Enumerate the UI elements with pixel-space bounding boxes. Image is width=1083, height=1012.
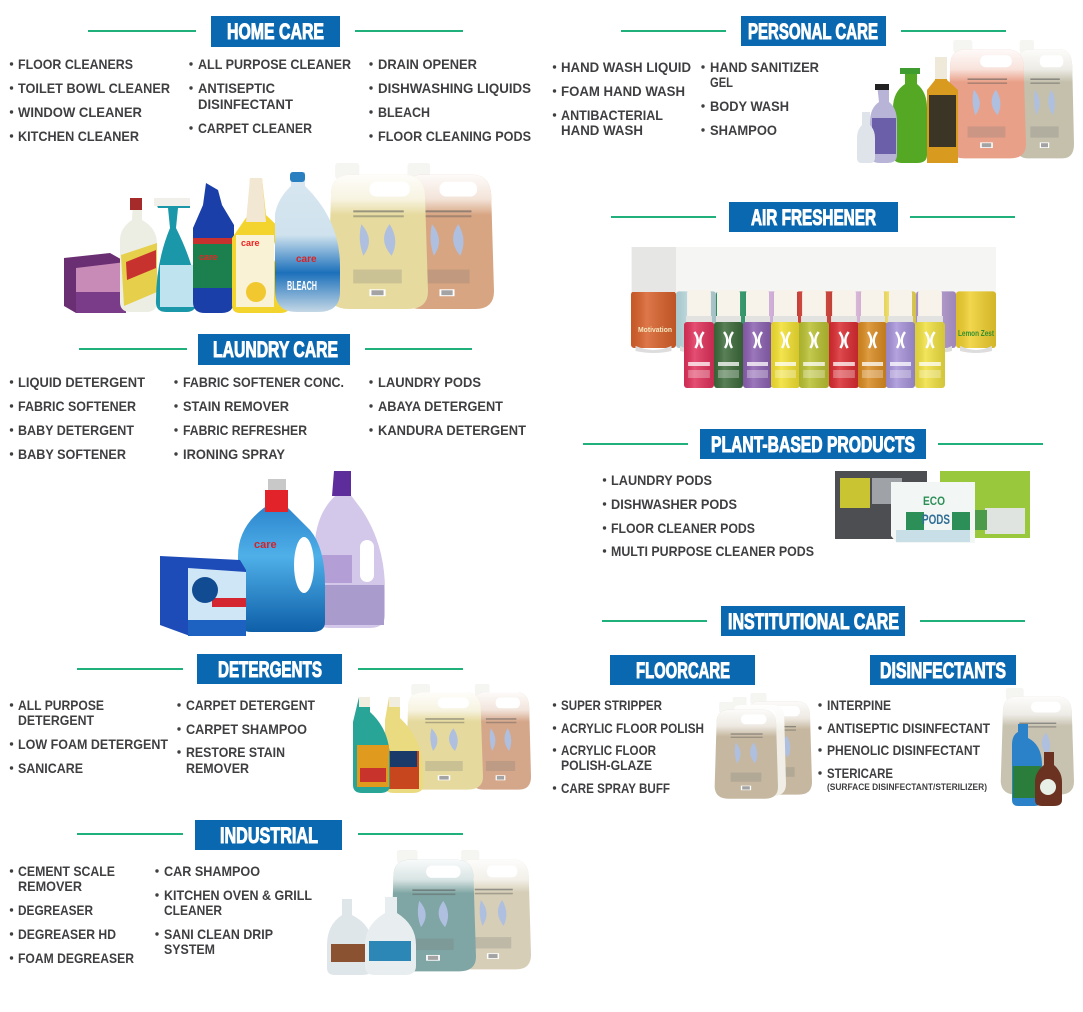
sub-heading: floorcare: FLOORCARE xyxy=(636,658,730,683)
list: industrial column 2: SANI CLEAN DRIP xyxy=(164,927,273,942)
list: laundry column 1 xyxy=(10,375,146,462)
list: plant-based products: FLOOR CLEANER PODS xyxy=(611,521,755,536)
panel: detergents xyxy=(10,654,531,793)
list: disinfectants: (SURFACE DISINFECTANT/STERILIZER) xyxy=(827,781,987,792)
panel: personal care xyxy=(553,16,1074,163)
list: detergents column 2 xyxy=(177,698,316,776)
heading: industrial: INDUSTRIAL xyxy=(220,823,318,848)
list: home care column 1: WINDOW CLEANER xyxy=(18,105,142,120)
list: disinfectants: ANTISEPTIC DISINFECTANT xyxy=(827,721,991,736)
product group: disinfectants xyxy=(1001,688,1074,806)
list: detergents column 2: CARPET DETERGENT xyxy=(186,698,316,713)
product group: pods boxes: ECO xyxy=(923,494,945,508)
heading: home care xyxy=(211,16,340,47)
list: detergents column 1 xyxy=(10,698,169,776)
list: industrial column 1: DEGREASER xyxy=(18,903,93,918)
list: laundry column 1: BABY SOFTENER xyxy=(18,447,126,462)
panel: plant-based products xyxy=(583,429,1043,559)
heading: industrial xyxy=(195,820,342,850)
heading: air freshener: AIR FRESHENER xyxy=(751,205,876,230)
product group: home care xyxy=(64,163,494,313)
heading: detergents: DETERGENTS xyxy=(218,657,322,682)
list: industrial column 2: KITCHEN OVEN & GRILL xyxy=(164,888,312,903)
list: floorcare: CARE SPRAY BUFF xyxy=(561,781,670,796)
product group: laundry care: care xyxy=(254,539,277,551)
list: laundry column 2: FABRIC SOFTENER CONC. xyxy=(183,375,344,390)
list: personal care column 1: HAND WASH LIQUID xyxy=(561,60,691,75)
panel: laundry care xyxy=(10,334,527,636)
list: floorcare: POLISH-GLAZE xyxy=(561,758,652,773)
panel: institutional care xyxy=(553,606,1074,806)
list: industrial column 1: CEMENT SCALE xyxy=(18,864,115,879)
list: detergents column 1: ALL PURPOSE xyxy=(18,698,104,713)
list: personal care column 1: FOAM HAND WASH xyxy=(561,84,685,99)
heading: plant-based products xyxy=(700,429,926,459)
heading: plant-based products: PLANT-BASED PRODUCTS xyxy=(711,432,915,457)
list: industrial column 1: DEGREASER HD xyxy=(18,927,116,942)
panel: industrial xyxy=(10,820,531,975)
sub-heading: disinfectants: DISINFECTANTS xyxy=(880,658,1006,683)
list: detergents column 2: REMOVER xyxy=(186,761,249,776)
product group: home care: care xyxy=(296,254,317,265)
list: industrial column 2: CAR SHAMPOO xyxy=(164,864,260,879)
panel: home care xyxy=(10,16,531,313)
list: plant-based products: MULTI PURPOSE CLEANER PODS xyxy=(611,544,814,559)
heading: air freshener xyxy=(729,202,898,232)
list: home care column 3: FLOOR CLEANING PODS xyxy=(378,129,531,144)
heading: personal care: PERSONAL CARE xyxy=(748,19,878,44)
product group: laundry care xyxy=(160,471,385,636)
list: industrial column 1: REMOVER xyxy=(18,879,82,894)
heading: detergents xyxy=(197,654,342,684)
list: plant-based products: DISHWASHER PODS xyxy=(611,497,737,512)
list: home care column 2: CARPET CLEANER xyxy=(198,121,312,136)
product group: pods boxes: PODS xyxy=(922,511,950,527)
list: home care column 1: TOILET BOWL CLEANER xyxy=(18,81,170,96)
list: plant-based products: LAUNDRY PODS xyxy=(611,473,712,488)
list: floorcare xyxy=(553,698,704,796)
product group: air freshener cans: Motivation xyxy=(638,327,672,334)
heading: institutional care: INSTITUTIONAL CARE xyxy=(728,609,899,634)
list: disinfectants xyxy=(818,698,991,792)
list: personal care column 2: BODY WASH xyxy=(710,99,789,114)
list: personal care column 1: HAND WASH xyxy=(561,123,643,138)
product group: home care: care xyxy=(241,238,260,248)
product group: detergents xyxy=(353,684,531,793)
heading: home care: HOME CARE xyxy=(227,19,324,44)
list: personal care column 2 xyxy=(701,60,819,138)
list: home care column 2: ALL PURPOSE CLEANER xyxy=(198,57,351,72)
list: disinfectants: STERICARE xyxy=(827,766,893,781)
list: home care column 1: FLOOR CLEANERS xyxy=(18,57,133,72)
list: home care column 1: KITCHEN CLEANER xyxy=(18,129,139,144)
product group: industrial xyxy=(327,850,531,975)
list: industrial column 1: FOAM DEGREASER xyxy=(18,951,134,966)
list: personal care column 2: GEL xyxy=(710,75,733,90)
list: industrial column 2 xyxy=(155,864,312,957)
product group: personal care xyxy=(857,40,1074,163)
list: laundry column 3: ABAYA DETERGENT xyxy=(378,399,504,414)
list: disinfectants: INTERPINE xyxy=(827,698,891,713)
sub-heading: disinfectants xyxy=(870,655,1016,685)
list: industrial column 2: CLEANER xyxy=(164,903,222,918)
list: home care column 2: DISINFECTANT xyxy=(198,97,294,112)
list: laundry column 1: BABY DETERGENT xyxy=(18,423,135,438)
list: personal care column 2: SHAMPOO xyxy=(710,123,777,138)
list: industrial column 2: SYSTEM xyxy=(164,942,215,957)
list: detergents column 1: SANICARE xyxy=(18,761,83,776)
product group: home care: care xyxy=(199,252,218,262)
product group: air freshener cans xyxy=(631,247,996,388)
list: laundry column 3: LAUNDRY PODS xyxy=(378,375,481,390)
list: personal care column 2: HAND SANITIZER xyxy=(710,60,819,75)
list: home care column 2 xyxy=(189,57,351,136)
list: laundry column 3 xyxy=(369,375,527,438)
list: laundry column 3: KANDURA DETERGENT xyxy=(378,423,527,438)
list: laundry column 1: FABRIC SOFTENER xyxy=(18,399,136,414)
list: home care column 3: DRAIN OPENER xyxy=(378,57,477,72)
list: home care column 3 xyxy=(369,57,531,144)
panel: air freshener xyxy=(611,202,1015,388)
list: floorcare: SUPER STRIPPER xyxy=(561,698,662,713)
heading: laundry care: LAUNDRY CARE xyxy=(213,337,338,362)
product group: pods boxes xyxy=(835,471,1030,543)
heading: institutional care xyxy=(721,606,905,636)
heading: laundry care xyxy=(198,334,350,365)
list: floorcare: ACRYLIC FLOOR xyxy=(561,743,656,758)
product group: air freshener cans: Lemon Zest xyxy=(958,329,994,338)
list: personal care column 1 xyxy=(553,60,691,138)
list: detergents column 2: RESTORE STAIN xyxy=(186,745,285,760)
list: personal care column 1: ANTIBACTERIAL xyxy=(561,108,663,123)
list: floorcare: ACRYLIC FLOOR POLISH xyxy=(561,721,704,736)
list: home care column 2: ANTISEPTIC xyxy=(198,81,275,96)
heading: personal care xyxy=(741,16,886,46)
list: detergents column 1: LOW FOAM DETERGENT xyxy=(18,737,169,752)
product group: floorcare xyxy=(715,693,812,799)
sub-heading: floorcare xyxy=(610,655,755,685)
list: laundry column 2 xyxy=(174,375,344,462)
list: home care column 1 xyxy=(10,57,170,144)
product group: home care: BLEACH xyxy=(287,278,317,293)
list: detergents column 2: CARPET SHAMPOO xyxy=(186,722,307,737)
list: laundry column 2: STAIN REMOVER xyxy=(183,399,289,414)
list: disinfectants: PHENOLIC DISINFECTANT xyxy=(827,743,981,758)
list: plant-based products xyxy=(603,473,814,559)
list: laundry column 2: IRONING SPRAY xyxy=(183,447,285,462)
list: home care column 3: BLEACH xyxy=(378,105,430,120)
list: detergents column 1: DETERGENT xyxy=(18,713,95,728)
list: laundry column 2: FABRIC REFRESHER xyxy=(183,423,307,438)
list: industrial column 1 xyxy=(10,864,134,966)
list: home care column 3: DISHWASHING LIQUIDS xyxy=(378,81,531,96)
list: laundry column 1: LIQUID DETERGENT xyxy=(18,375,146,390)
